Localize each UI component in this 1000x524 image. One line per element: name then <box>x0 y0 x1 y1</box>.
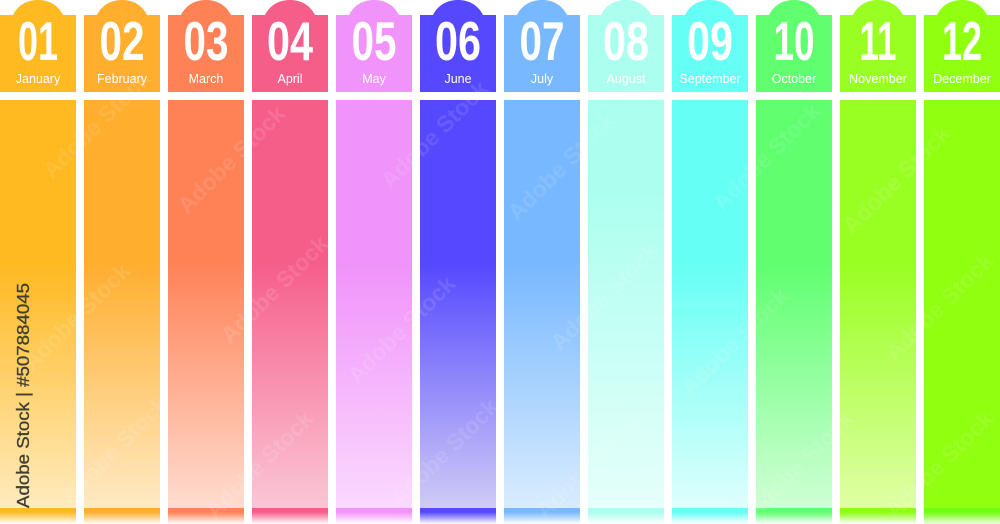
bar: July <box>504 100 580 508</box>
foot: September <box>672 508 748 524</box>
label October: October <box>772 72 816 86</box>
watermarks: Adobe Stock <box>880 405 998 523</box>
tab: March <box>168 0 244 92</box>
number 09: 09 <box>687 10 733 72</box>
column: January <box>0 0 76 524</box>
watermarks: Adobe Stock <box>675 282 793 400</box>
foot: February <box>84 508 160 524</box>
bar: August <box>588 100 664 508</box>
number 11: 11 <box>860 10 896 72</box>
number 05: 05 <box>352 10 396 72</box>
foot: April <box>252 508 328 524</box>
watermarks: Adobe Stock <box>502 107 620 225</box>
foot: June <box>420 508 496 524</box>
bar: May <box>336 100 412 508</box>
number 02: 02 <box>100 10 144 72</box>
label February: February <box>97 72 148 86</box>
label August: August <box>607 72 646 86</box>
column: November <box>840 0 916 524</box>
watermarks: Adobe Stock <box>740 405 858 523</box>
number 07: 07 <box>520 10 564 72</box>
bar: November <box>840 100 916 508</box>
number 01: 01 <box>18 10 58 72</box>
label November: November <box>849 72 907 86</box>
label January: January <box>16 72 61 86</box>
number 04: 04 <box>267 10 313 72</box>
column: March <box>168 0 244 524</box>
column: July <box>504 0 580 524</box>
tab: December <box>924 0 1000 92</box>
column: September <box>672 0 748 524</box>
tab: August <box>588 0 664 92</box>
bar: March <box>168 100 244 508</box>
watermarks: Adobe Stock <box>215 230 333 348</box>
number 10: 10 <box>774 10 814 72</box>
watermarks: Adobe Stock <box>530 405 648 523</box>
foot: December <box>924 508 1000 524</box>
label September: September <box>679 72 741 86</box>
tab: January <box>0 0 76 92</box>
watermarks: Adobe Stock <box>55 390 173 508</box>
number 08: 08 <box>603 10 649 72</box>
tab: May <box>336 0 412 92</box>
foot: January <box>0 508 76 524</box>
tab: April <box>252 0 328 92</box>
label July: July <box>531 72 554 86</box>
foot: August <box>588 508 664 524</box>
watermarks: Adobe Stock <box>707 97 825 215</box>
watermarks: Adobe Stock <box>375 75 493 193</box>
label March: March <box>189 72 223 86</box>
foot: May <box>336 508 412 524</box>
watermarks: Adobe Stock <box>837 120 955 238</box>
column: February <box>84 0 160 524</box>
label April: April <box>277 72 303 86</box>
label June: June <box>444 72 472 86</box>
bar: January <box>0 100 76 508</box>
number 03: 03 <box>184 10 228 72</box>
watermarks: Adobe Stock <box>172 100 290 218</box>
column: May <box>336 0 412 524</box>
foot: July <box>504 508 580 524</box>
column: October <box>756 0 832 524</box>
foot: November <box>840 508 916 524</box>
watermarks: Adobe Stock <box>880 247 998 365</box>
bar: April <box>252 100 328 508</box>
tab: June <box>420 0 496 92</box>
bar: June <box>420 100 496 508</box>
label December: December <box>933 72 991 86</box>
tab: November <box>840 0 916 92</box>
bar: October <box>756 100 832 508</box>
bar: December <box>924 100 1000 508</box>
watermarks: Adobe Stock <box>545 237 663 355</box>
foot: October <box>756 508 832 524</box>
number 06: 06 <box>435 10 481 72</box>
watermarks: Adobe Stock <box>342 270 460 388</box>
foot: March <box>168 508 244 524</box>
tab: September <box>672 0 748 92</box>
stock id caption: Adobe Stock | #507884045 <box>13 283 33 508</box>
watermarks: Adobe Stock <box>37 65 155 183</box>
bar: February <box>84 100 160 508</box>
tab: July <box>504 0 580 92</box>
tab: October <box>756 0 832 92</box>
watermarks: Adobe Stock <box>17 257 135 375</box>
column: June <box>420 0 496 524</box>
column: December <box>924 0 1000 524</box>
watermarks: Adobe Stock <box>385 393 503 511</box>
bar: September <box>672 100 748 508</box>
column: August <box>588 0 664 524</box>
tab: February <box>84 0 160 92</box>
column: April <box>252 0 328 524</box>
watermarks: Adobe Stock <box>200 405 318 523</box>
label May: May <box>362 72 387 86</box>
